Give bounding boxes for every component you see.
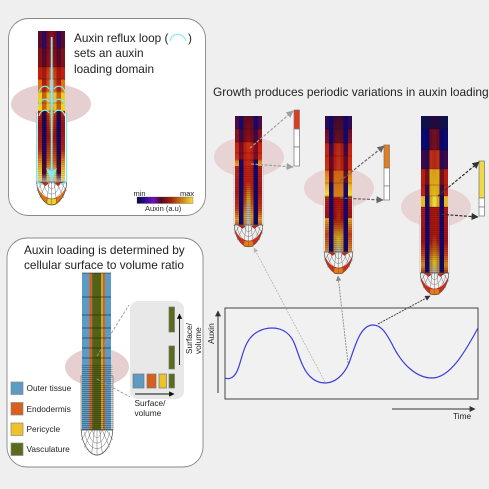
reflux loop arrows bbox=[37, 37, 66, 184]
axis labels: Surface/ bbox=[184, 322, 194, 354]
plot: auxin over time bbox=[206, 308, 478, 421]
y axis label: Auxin bbox=[206, 323, 216, 344]
root tip mesh bbox=[81, 430, 113, 455]
legend: Outer tissue bbox=[26, 383, 72, 393]
inset bar: low auxin bbox=[294, 110, 300, 166]
curve bbox=[225, 325, 478, 383]
heading: cellular surface to volume ratio bbox=[24, 258, 184, 272]
color bar legend: max bbox=[180, 189, 194, 198]
inset: cell shape comparison: volume bbox=[134, 408, 162, 418]
inset: cell shape comparison: volume bbox=[193, 327, 203, 354]
legend bbox=[11, 382, 72, 456]
text: reflux loop: Auxin reflux loop ( bbox=[74, 31, 168, 45]
inset: cell shape comparison: Surface/ bbox=[134, 398, 166, 408]
root: low auxin stage bbox=[234, 116, 263, 247]
arrow: rise to second root bbox=[338, 276, 348, 363]
root: tissue map bbox=[81, 273, 113, 455]
legend: Vasculature bbox=[26, 444, 70, 454]
panel: surface to volume bbox=[7, 238, 203, 467]
arrows: root to inset, rising bbox=[340, 146, 384, 200]
highlight ellipses bbox=[214, 137, 471, 227]
inset: cell shape comparison bbox=[130, 301, 203, 418]
arrows bbox=[135, 314, 180, 394]
arrows: root to inset, low bbox=[250, 111, 293, 167]
arrows: root to inset, high bbox=[437, 162, 479, 217]
tip bbox=[420, 273, 449, 295]
root heatmap bbox=[36, 31, 67, 205]
highlight ellipse: loading domain bbox=[11, 84, 91, 124]
text: reflux loop bbox=[74, 31, 192, 76]
zoom lines bbox=[97, 305, 130, 397]
color bar legend bbox=[134, 189, 194, 213]
root: rising stage bbox=[324, 116, 353, 274]
root tip bbox=[37, 182, 67, 205]
inset bar: rising bbox=[384, 145, 390, 200]
legend: Endodermis bbox=[26, 404, 71, 414]
color bar legend: Auxin (a.u) bbox=[145, 204, 182, 213]
arrow: peak to third root bbox=[378, 296, 430, 324]
y axis arrow bbox=[217, 311, 219, 393]
heading bbox=[24, 243, 185, 272]
panel: auxin reflux loop bbox=[8, 18, 206, 216]
heading: growth: Growth produces periodic variations in auxin loading bbox=[213, 85, 489, 99]
highlight ellipse bbox=[65, 348, 129, 386]
tip bbox=[324, 252, 353, 274]
root: high auxin stage bbox=[420, 116, 449, 295]
x axis arrow bbox=[392, 408, 475, 410]
arrow: trough to first root bbox=[254, 248, 325, 382]
x axis label: Time bbox=[453, 411, 472, 421]
color bar legend: min bbox=[134, 189, 146, 198]
text: reflux loop: ) bbox=[188, 31, 192, 45]
tip bbox=[234, 225, 263, 247]
heading: Auxin loading is determined by bbox=[24, 243, 185, 257]
icon: loop symbol bbox=[170, 34, 186, 41]
text: reflux loop: loading domain bbox=[74, 62, 154, 76]
bars bbox=[133, 307, 174, 388]
legend: Pericycle bbox=[26, 424, 61, 434]
inset bar: high bbox=[479, 161, 484, 216]
text: reflux loop: sets an auxin bbox=[74, 46, 144, 60]
